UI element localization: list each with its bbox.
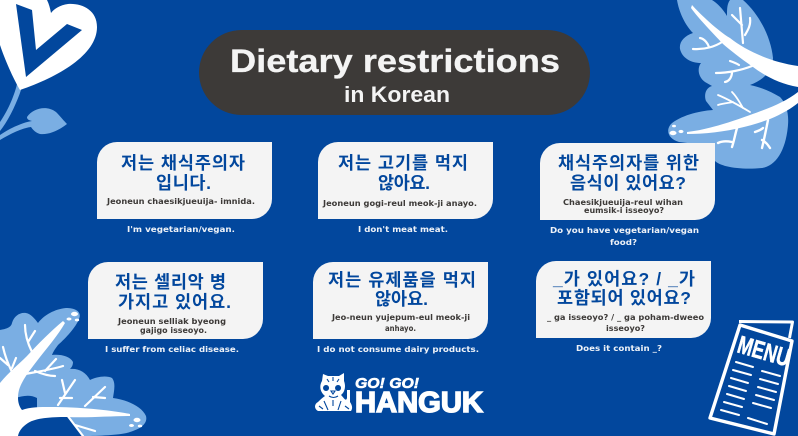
subtitle: in Korean: [344, 82, 450, 107]
title heading: Dietary restrictions: [230, 43, 560, 79]
icon: top-right leaf branch: [668, 0, 798, 169]
card: vegetarian food question: eumsik-i isseoyo?: [584, 206, 664, 215]
card: vegetarian food question: food?: [610, 237, 637, 247]
card: celiac: gajigo isseoyo.: [140, 326, 207, 335]
card: vegetarian: 저는 채식주의자: [121, 153, 245, 173]
card: no meat: 저는 고기를 먹지: [338, 153, 468, 173]
card: no meat: [318, 142, 493, 234]
card: vegetarian: [97, 142, 272, 234]
card: vegetarian food question: 채식주의자를 위한: [558, 153, 699, 173]
card: contains: _ ga isseoyo? / _ ga poham-dweeo: [547, 313, 705, 322]
card: vegetarian: I'm vegetarian/vegan.: [127, 224, 235, 234]
card: contains: Does it contain _?: [576, 343, 662, 353]
card: contains: 포함되어 있어요?: [557, 288, 691, 308]
card: dairy: 저는 유제품을 먹지: [328, 270, 476, 290]
card: contains: [536, 261, 711, 353]
card: dairy: Jeo-neun yujepum-eul meok-ji: [331, 313, 470, 322]
icon: bottom-left leaf branch: [0, 308, 146, 436]
card: dairy: anhayo.: [385, 324, 416, 333]
card: dairy: I do not consume dairy products.: [317, 344, 479, 354]
card: celiac: Jeoneun selliak byeong: [117, 317, 226, 326]
icon: top-left leaf: [0, 0, 97, 140]
icon: menu: [710, 322, 793, 434]
card: vegetarian: Jeoneun chaesikjueuija- imnida.: [106, 197, 255, 206]
icon: tiger mascot: [315, 373, 352, 411]
logo text: HANGUK: HANGUK: [355, 387, 483, 419]
card: contains: isseoyo?: [606, 324, 645, 333]
card: celiac: 저는 셀리악 병: [115, 272, 226, 292]
card: no meat: 않아요.: [378, 173, 430, 193]
card: vegetarian food question: [540, 143, 715, 247]
card: celiac: [88, 262, 263, 354]
card: celiac: I suffer from celiac disease.: [105, 344, 239, 354]
card: dairy: 않아요.: [375, 289, 428, 309]
card: vegetarian: 입니다.: [156, 173, 211, 193]
card: celiac: 가지고 있어요.: [118, 292, 231, 312]
card: no meat: I don't meat meat.: [358, 224, 448, 234]
card: vegetarian food question: 음식이 있어요?: [570, 173, 686, 193]
card: contains: _가 있어요? / _가: [552, 269, 695, 289]
card: vegetarian food question: Do you have vegetarian/vegan: [550, 225, 699, 235]
title pill: [199, 30, 590, 115]
logo text: GO! GO!: GO! GO!: [355, 375, 419, 392]
card: no meat: Jeoneun gogi-reul meok-ji anayo.: [322, 199, 477, 208]
logo: Go! Go! Hanguk: [315, 373, 483, 419]
card: vegetarian food question: Chaesikjueuija-reul wihan: [563, 198, 683, 207]
card: dairy: [313, 262, 488, 354]
